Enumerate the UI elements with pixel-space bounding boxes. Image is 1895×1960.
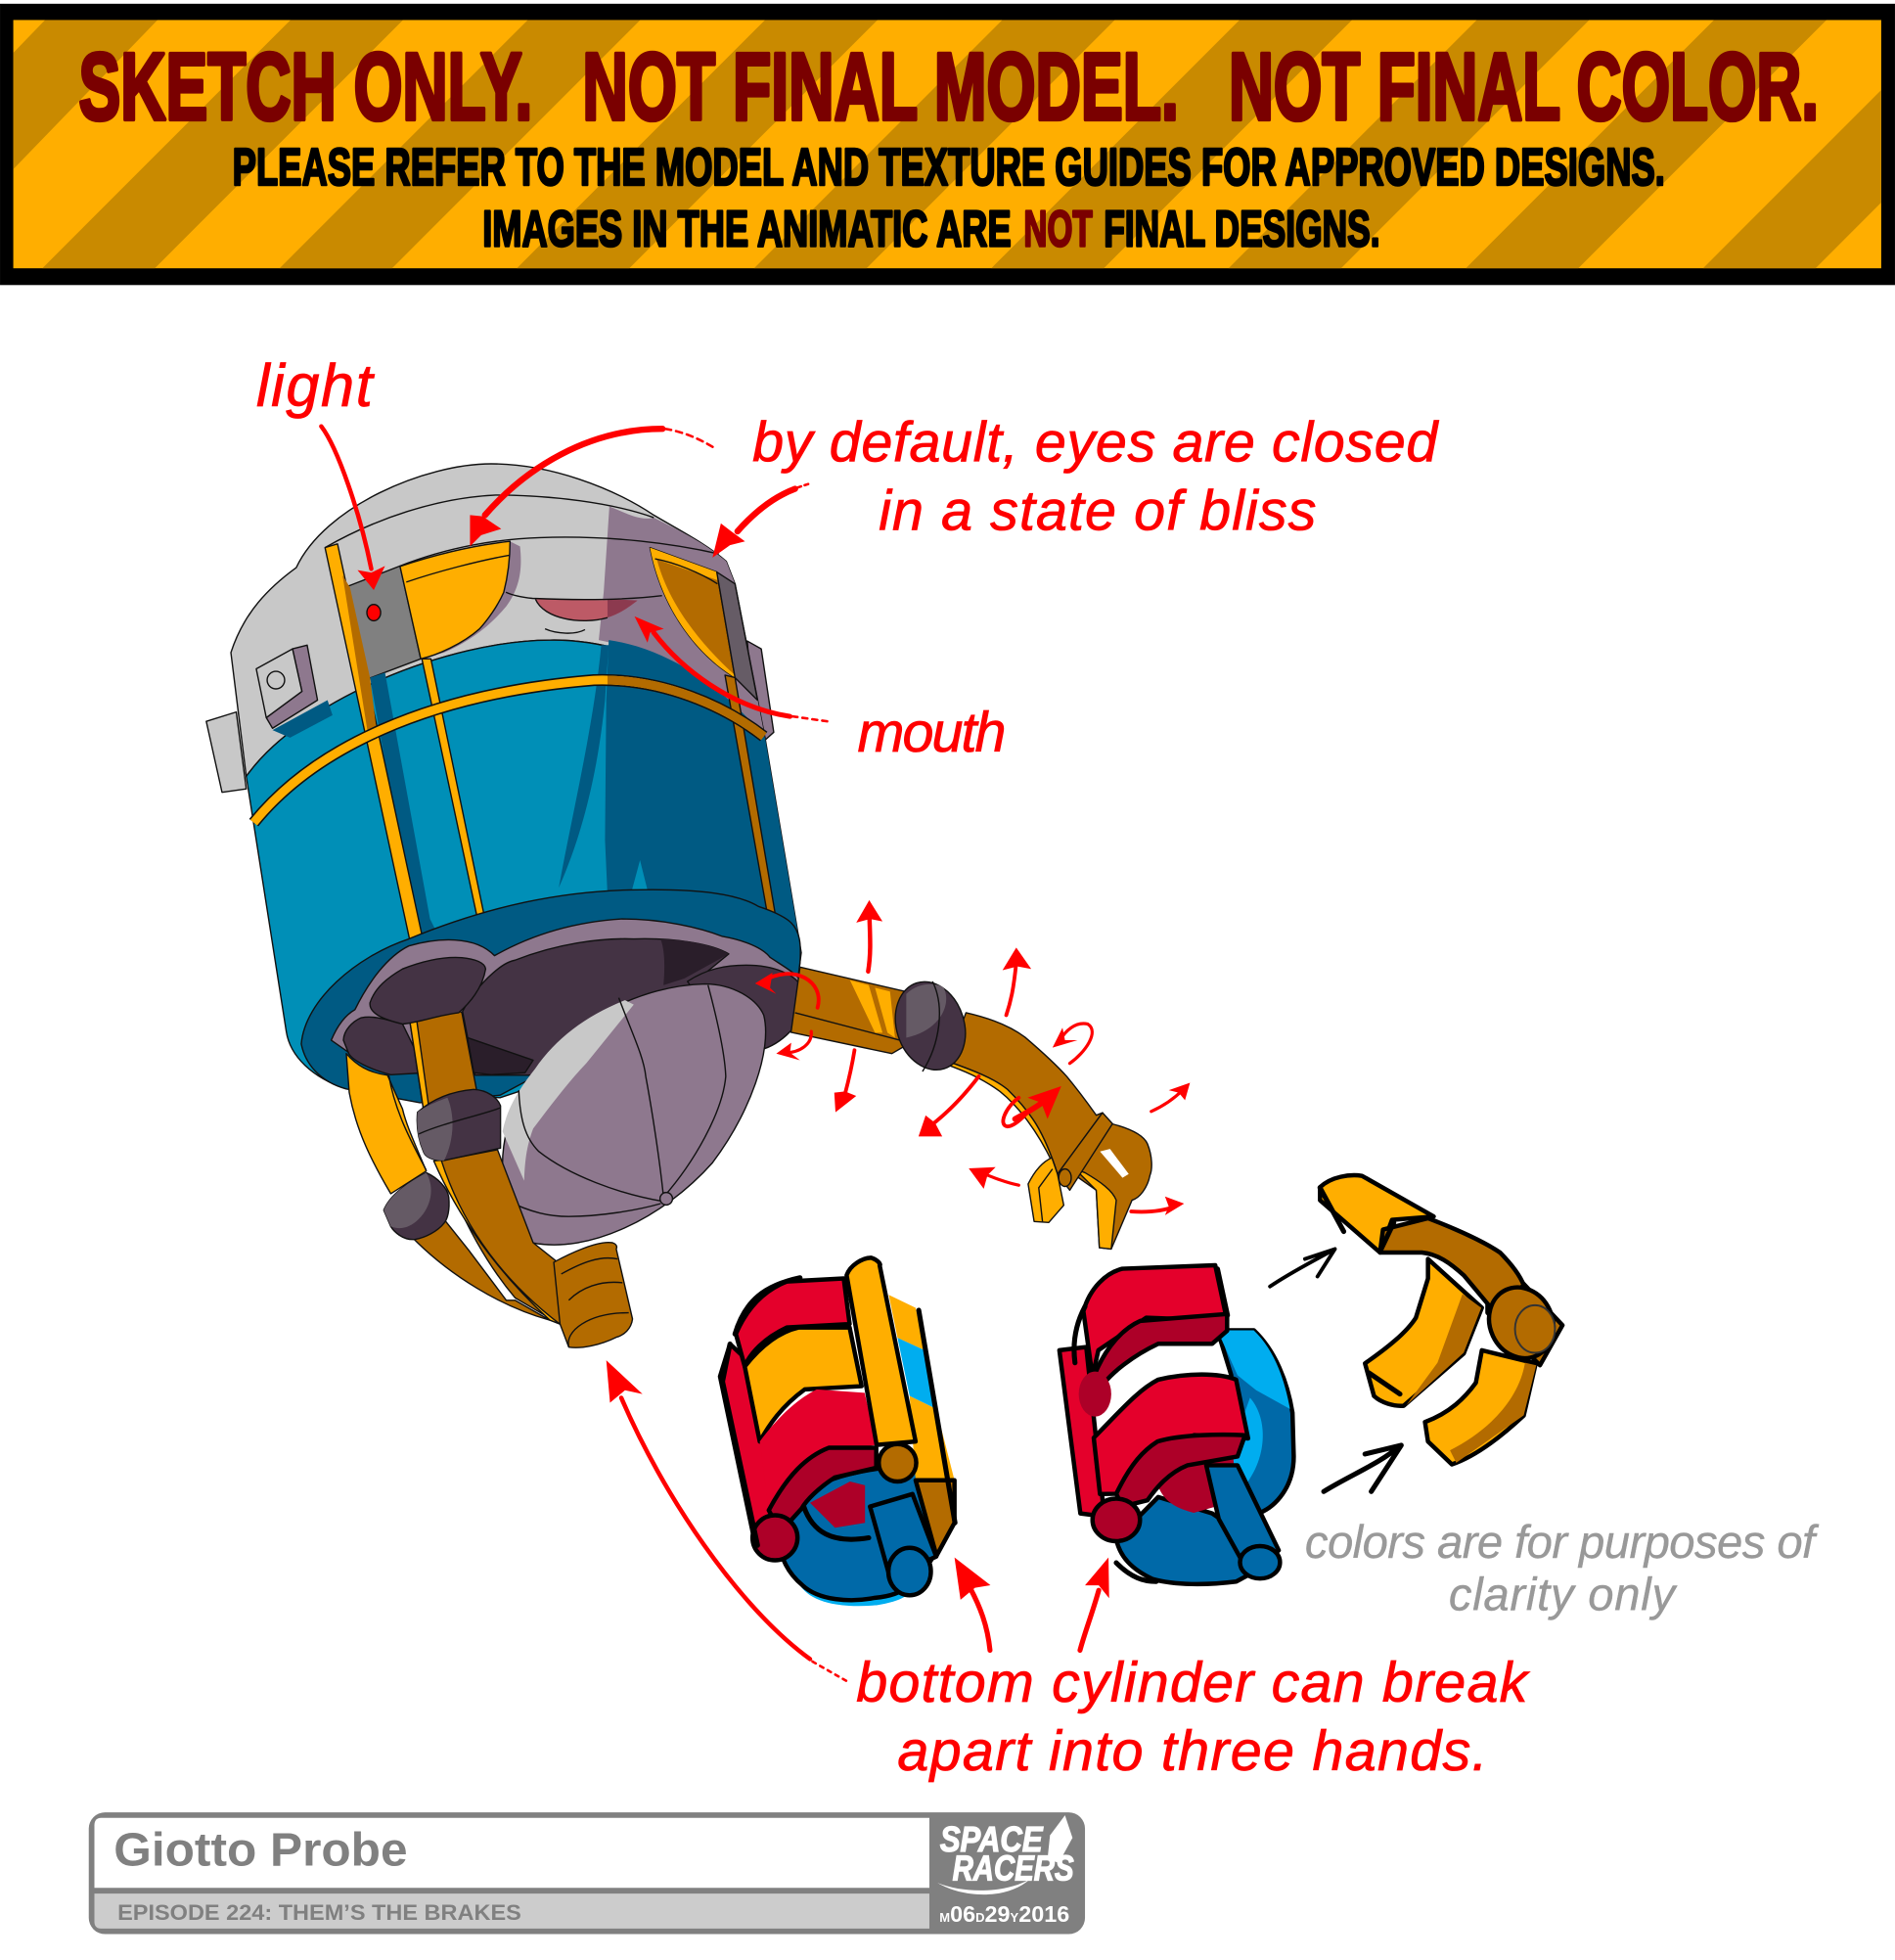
bottom rim bbox=[301, 889, 800, 1103]
left red column bbox=[1060, 1347, 1105, 1517]
arrow: left eye bbox=[470, 429, 714, 546]
far left arm bbox=[346, 1054, 427, 1194]
note: bottom cylinder line two: apart into three hands. bbox=[897, 1720, 1487, 1783]
lower left joint bbox=[384, 1172, 449, 1240]
dark hub interior bbox=[463, 938, 729, 1075]
black arrow: top finger bbox=[1270, 1249, 1335, 1287]
red top band bbox=[736, 1279, 849, 1366]
cyan under edge bbox=[800, 1585, 913, 1606]
note: eyes closed line two: in a state of bliss bbox=[879, 480, 1316, 543]
center red band bbox=[1094, 1375, 1248, 1494]
arrow: light bbox=[321, 427, 385, 590]
sketch: closed hand bbox=[720, 1257, 955, 1606]
red end circle bbox=[752, 1516, 797, 1561]
probe illustration bbox=[206, 464, 1151, 1347]
motion arrows bbox=[755, 900, 1190, 1215]
blue ring back bbox=[1217, 1330, 1293, 1513]
bottom finger bbox=[1425, 1350, 1536, 1465]
claw bbox=[1028, 1113, 1151, 1249]
purple ring bbox=[332, 919, 802, 1063]
middle finger bbox=[1365, 1259, 1482, 1406]
top red band bbox=[1083, 1265, 1227, 1377]
black arrow: bottom finger bbox=[1324, 1445, 1401, 1491]
left side tab bbox=[206, 712, 247, 793]
sketch lines bbox=[1074, 1269, 1228, 1581]
cyan side bbox=[1217, 1330, 1290, 1409]
warning banner: NOT bbox=[1023, 202, 1093, 258]
dark red arc bbox=[769, 1448, 877, 1531]
left side box bbox=[256, 645, 333, 738]
note: eyes closed line one: by default, eyes are closed bbox=[752, 411, 1439, 474]
orange strips bbox=[325, 544, 776, 941]
title block bbox=[89, 1812, 1085, 1935]
arrow: right eye bbox=[712, 483, 809, 558]
note: mouth: mouth bbox=[858, 702, 1007, 764]
warning banner: SKETCH ONLY. bbox=[79, 33, 532, 140]
logo: RACERS bbox=[953, 1849, 1074, 1889]
dark red patch bbox=[1079, 1372, 1111, 1417]
title: Giotto Probe bbox=[113, 1823, 408, 1876]
link behind knob bbox=[1487, 1246, 1562, 1365]
note: colors line two: clarity only bbox=[1449, 1570, 1678, 1621]
arm end cylinder bbox=[554, 1243, 633, 1347]
upper left bulb bbox=[370, 957, 485, 1024]
blue base bbox=[1116, 1497, 1278, 1584]
lower left bulb bbox=[343, 1017, 427, 1074]
head shade bbox=[599, 506, 765, 738]
right forearm bbox=[945, 1013, 1103, 1174]
orange band bbox=[744, 1328, 862, 1441]
upper left joint bbox=[417, 1089, 501, 1161]
knob bbox=[879, 1444, 917, 1481]
sphere bbox=[503, 984, 766, 1245]
dark red arc center bbox=[1116, 1435, 1245, 1507]
cyan inner bbox=[1232, 1397, 1263, 1494]
arrow: mouth bbox=[635, 616, 828, 721]
grey light panel bbox=[347, 566, 421, 679]
dark red inner bbox=[1155, 1437, 1238, 1513]
dark red arc top bbox=[1093, 1314, 1227, 1383]
note: bottom cylinder line one: bottom cylinder can break bbox=[856, 1652, 1531, 1714]
blue body bbox=[247, 640, 801, 1098]
sphere panel lines bbox=[506, 985, 726, 1216]
arrow: hand two bbox=[1080, 1558, 1109, 1651]
logo bbox=[937, 1815, 1074, 1894]
eye shadow bbox=[425, 541, 520, 658]
red lower band bbox=[760, 1390, 877, 1510]
episode: EPISODE 224: THEM’S THE BRAKES bbox=[117, 1900, 521, 1925]
date: M06D29Y2016 bbox=[939, 1901, 1069, 1927]
arrow: hand one bbox=[955, 1558, 990, 1651]
orange long bar bbox=[846, 1257, 916, 1445]
right side bracket bbox=[747, 641, 774, 740]
left red edge bbox=[720, 1344, 775, 1549]
arrow: bottom cylinder to probe bbox=[607, 1360, 847, 1681]
right upper arm bbox=[791, 967, 913, 1054]
logo: SPACE bbox=[940, 1820, 1044, 1859]
sketch lines bbox=[1320, 1188, 1400, 1394]
blue cylinder bbox=[870, 1494, 936, 1595]
warning banner: FINAL DESIGNS. bbox=[1104, 202, 1380, 258]
red end circle bbox=[1093, 1499, 1140, 1541]
right eye bbox=[650, 548, 757, 700]
lower left arm piece bbox=[414, 1219, 550, 1320]
right column bbox=[888, 1295, 955, 1556]
sphere highlight bbox=[503, 1000, 634, 1181]
sketch lines bbox=[723, 1278, 869, 1545]
sketch: opening hand bbox=[1060, 1265, 1293, 1584]
front left arm bbox=[402, 974, 571, 1324]
mouth bbox=[506, 592, 662, 633]
note: colors line one: colors are for purposes of bbox=[1305, 1517, 1820, 1569]
top finger bbox=[1320, 1175, 1434, 1253]
horizontal band bbox=[253, 680, 764, 823]
blue cylinder bbox=[1206, 1465, 1280, 1578]
warning banner: NOT FINAL MODEL. bbox=[582, 33, 1179, 140]
right joint bbox=[884, 973, 976, 1079]
right hub lobe bbox=[688, 965, 801, 1049]
blue body shade bbox=[370, 640, 801, 953]
blue base bbox=[781, 1463, 936, 1600]
head arcs bbox=[325, 495, 719, 566]
head dome bbox=[231, 464, 765, 776]
sketch: separated three hands bbox=[1320, 1175, 1565, 1465]
note: light: light bbox=[256, 351, 376, 419]
warning banner: IMAGES IN THE ANIMATIC ARE bbox=[482, 202, 1012, 258]
knob bbox=[1477, 1277, 1565, 1369]
light bbox=[367, 605, 381, 620]
dark curved link bbox=[1380, 1218, 1524, 1311]
left eye bbox=[400, 541, 510, 659]
dark red inside bbox=[810, 1481, 865, 1527]
warning banner bbox=[0, 4, 1895, 285]
